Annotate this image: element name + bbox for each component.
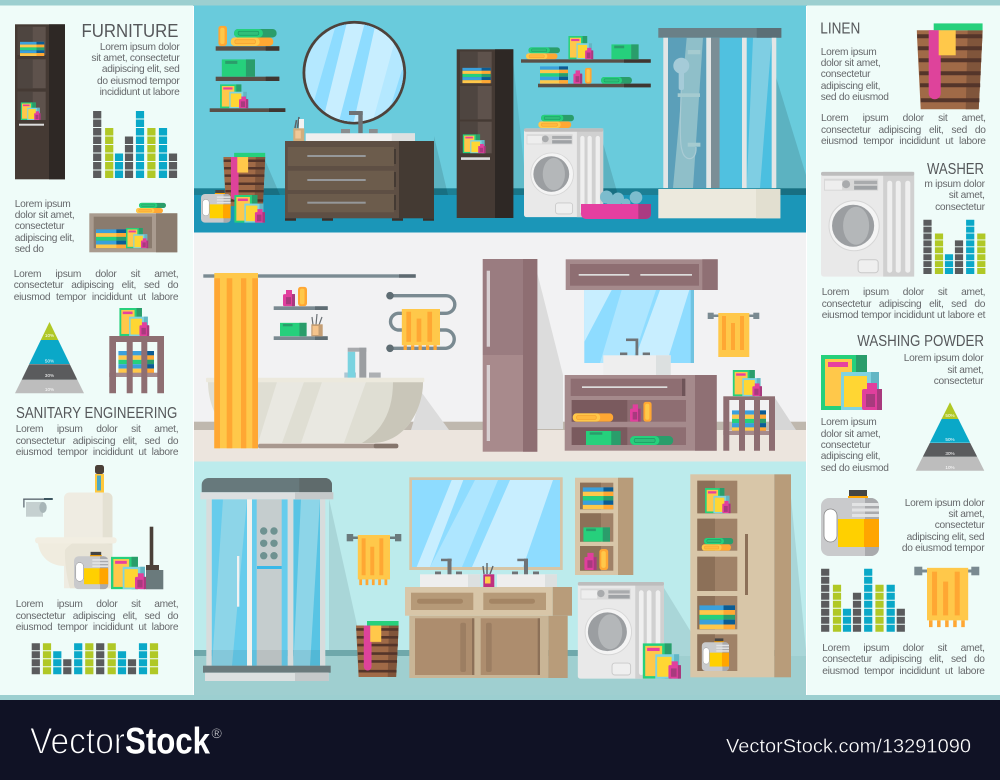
hanging towel	[708, 313, 759, 357]
pyramid chart: left	[15, 322, 84, 393]
heading: linen: LINEN	[820, 20, 860, 38]
pyramid chart: right: 50%	[945, 437, 955, 442]
text: washer paragraph	[822, 287, 986, 321]
footer id text: VectorStock.com/13291090	[726, 736, 971, 758]
text: powder note left: dolor sit amet,	[821, 429, 880, 440]
bathtub with faucet	[206, 348, 424, 448]
washing machine	[524, 115, 603, 217]
text: furniture intro: Lorem ipsum dolor	[100, 42, 180, 52]
curtain rod	[203, 274, 416, 278]
panel: right sidebar	[807, 6, 1000, 695]
text: linen note: dolor sit amet,	[821, 58, 880, 69]
vessel sink	[603, 338, 671, 375]
icon: small table with towels	[109, 308, 164, 393]
text: canister note: Lorem ipsum dolor	[905, 498, 984, 508]
toothbrush cup	[293, 117, 304, 141]
text: left paragraph one: consectetur adipiscing elit, sed do	[14, 280, 178, 291]
panel: left sidebar	[0, 6, 193, 695]
double vanity with sinks	[405, 559, 572, 678]
dark vanity cabinet with drawers	[285, 141, 434, 221]
text: left cabinet note: sed do	[15, 244, 44, 255]
glass shower cabin	[200, 478, 333, 681]
sink and faucet	[306, 111, 415, 141]
text: sanitary paragraph: eiusmod tempor incididunt ut labore	[16, 447, 178, 458]
text: powder note right	[904, 353, 984, 387]
icon: toilet with supplies	[23, 465, 163, 589]
text: furniture intro	[91, 42, 180, 98]
bar chart: bottom right	[825, 568, 901, 632]
pyramid chart: left: 30%	[45, 373, 54, 378]
text: powder note left: Lorem ipsum	[821, 417, 876, 428]
text: sanitary second paragraph: Lorem ipsum dolor sit amet,	[16, 599, 178, 610]
icon: yellow towel	[914, 567, 979, 627]
round mirror	[302, 21, 406, 125]
pyramid chart: right: 50%	[945, 413, 955, 418]
text: washer note	[924, 179, 985, 213]
shower curtain	[214, 273, 258, 448]
pyramid chart: left: 50%	[45, 358, 54, 364]
text: sanitary paragraph: consectetur adipiscing elit, sed do	[16, 436, 178, 447]
wide mirror	[409, 477, 563, 570]
bar chart: sanitary	[36, 643, 154, 674]
panel: white bathroom scene	[194, 232, 806, 462]
panel: blue bathroom scene	[194, 6, 806, 232]
heated towel rail	[386, 292, 455, 352]
text: washer paragraph: eiusmod tempor incididunt ut labore et	[822, 310, 985, 321]
pyramid chart: right: 30%	[945, 451, 955, 456]
text: furniture intro: adipiscing elit, sed	[102, 64, 180, 75]
text: left paragraph one	[14, 269, 178, 303]
panel: bottom strip	[0, 695, 1000, 700]
laundry basket and detergents	[201, 153, 265, 223]
text: washer note: sit amet,	[949, 190, 985, 201]
heading: washer: WASHER	[927, 161, 984, 178]
text: washer paragraph: consectetur adipiscing elit, sed do	[822, 299, 985, 310]
pyramid chart: right	[916, 402, 984, 471]
mauve vanity with shelves	[565, 375, 717, 451]
top strip	[0, 0, 1000, 6]
small table with towels	[723, 370, 775, 451]
tall beige cupboard	[690, 474, 791, 677]
text: left cabinet note: dolor sit amet,	[15, 210, 74, 221]
mirror with mauve upper cabinet	[566, 259, 718, 363]
text: left paragraph one: Lorem ipsum dolor sit amet,	[14, 269, 178, 280]
text: powder note right: sit amet,	[947, 365, 983, 376]
text: right bottom paragraph	[822, 643, 985, 677]
hanging towel	[347, 534, 401, 585]
pyramid chart: right: 10%	[945, 465, 955, 470]
text: canister note: do eiusmod tempor	[902, 543, 984, 554]
bar chart: washer	[928, 220, 981, 274]
text: linen paragraph: Lorem ipsum dolor sit amet,	[821, 113, 986, 124]
logo: VectorStock	[30, 720, 222, 762]
text: linen note: adipiscing elit,	[821, 81, 880, 92]
text: linen note: sed do eiusmod	[821, 92, 889, 103]
wall shelves with towels and powder	[210, 26, 285, 112]
text: right bottom paragraph: consectetur adipiscing elit, sed do	[822, 654, 985, 665]
text: powder note right: Lorem ipsum dolor	[904, 353, 983, 364]
text: canister note	[902, 498, 984, 554]
text: powder note left: consectetur	[821, 440, 870, 451]
text: left cabinet note	[15, 198, 74, 255]
text: left cabinet note: Lorem ipsum	[15, 198, 70, 210]
logo: VectorStock: Stock	[125, 720, 210, 762]
text: right bottom paragraph: eiusmod tempor incididunt ut labore	[822, 666, 985, 677]
shower cabin	[658, 28, 781, 218]
icon: washing machine	[821, 172, 914, 277]
laundry basket	[356, 621, 399, 677]
text: linen note	[821, 46, 889, 103]
text: furniture intro: do eiusmod tempor	[97, 76, 180, 87]
text: left cabinet note: adipiscing elit,	[15, 233, 74, 244]
heading: furniture: FURNITURE	[82, 21, 178, 41]
pyramid chart: left: 10%	[45, 333, 54, 338]
logo: VectorStock: Vector	[30, 720, 125, 762]
text: washer note: consectetur	[935, 202, 985, 213]
long shelves with towels	[521, 36, 651, 87]
small wall shelves	[274, 287, 328, 340]
tall mauve cabinet	[483, 259, 537, 452]
text: canister note: adipiscing elit, sed	[907, 532, 984, 543]
text: powder note left: sed do eiusmod	[821, 463, 889, 474]
washing machine with powder	[578, 582, 681, 679]
text: sanitary paragraph: Lorem ipsum dolor sit amet,	[16, 424, 178, 435]
text: furniture intro: sit amet, consectetur	[91, 53, 180, 64]
text: left paragraph one: eiusmod tempor incididunt ut labore	[14, 292, 178, 303]
panel: aqua bathroom scene	[194, 462, 806, 695]
text: left cabinet note: consectetur	[15, 221, 64, 232]
text: powder note right: consectetur	[934, 376, 983, 387]
wall cabinet with towels	[575, 478, 633, 575]
text: linen paragraph	[821, 113, 986, 147]
text: right bottom paragraph: Lorem ipsum dolor sit amet,	[822, 643, 985, 654]
text: washer note: m ipsum dolor	[924, 179, 985, 190]
text: furniture intro: incididunt ut labore	[100, 87, 180, 98]
pyramid chart: left: 10%	[45, 387, 54, 392]
pink basin with foam	[581, 190, 651, 219]
text: powder note left: adipiscing elit,	[821, 451, 880, 462]
icon: tall dark cabinet	[15, 24, 65, 179]
text: sanitary second paragraph: consectetur adipiscing elit, sed do	[16, 611, 178, 622]
text: linen paragraph: eiusmod tempor incididunt ut labore	[821, 136, 986, 147]
footer band	[0, 700, 1000, 780]
text: linen note: Lorem ipsum	[821, 46, 876, 58]
text: canister note: consectetur	[935, 520, 984, 531]
text: sanitary second paragraph	[16, 599, 178, 633]
logo: VectorStock: ®	[212, 725, 222, 741]
text: powder note left	[821, 417, 889, 474]
tall dark cabinet	[457, 49, 513, 218]
icon: powder boxes	[821, 355, 882, 410]
text: canister note: sit amet,	[948, 509, 984, 520]
text: linen paragraph: consectetur adipiscing elit, sed do	[821, 125, 986, 136]
heading: sanitary engineering: SANITARY ENGINEERING	[16, 405, 177, 422]
text: washer paragraph: Lorem ipsum dolor sit amet,	[822, 287, 985, 298]
bar chart: furniture	[97, 111, 173, 178]
icon: laundry basket	[917, 23, 983, 109]
text: sanitary second paragraph: eiusmod tempor incididunt ut labore	[16, 622, 178, 633]
text: linen note: consectetur	[821, 69, 870, 80]
icon: detergent canister	[821, 490, 879, 556]
icon: small cabinet with towels	[89, 203, 177, 252]
text: sanitary paragraph	[16, 424, 178, 458]
